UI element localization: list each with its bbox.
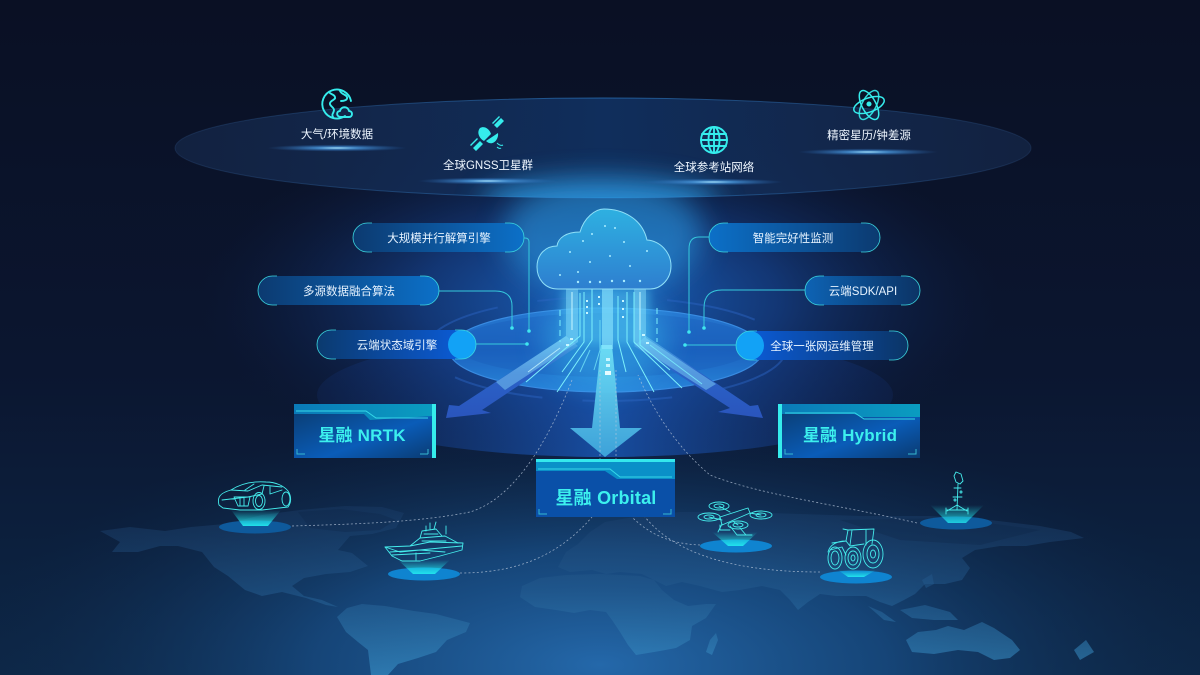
arrow: to Orbital (570, 345, 642, 457)
panel: Orbital: 星融 Orbital (555, 488, 657, 508)
cloud dots (559, 225, 648, 283)
panel: engine 3: 云端状态域引擎 (357, 338, 438, 352)
connector lines (439, 237, 805, 347)
North America (100, 506, 404, 607)
center disk (426, 295, 786, 401)
label: 精密星历/钟差源 (827, 128, 911, 142)
cloud (537, 209, 671, 289)
icon: atom (852, 88, 886, 122)
New Zealand (1074, 640, 1094, 660)
arrow: to Hybrid (634, 336, 763, 418)
panel: engine 3 (317, 330, 476, 359)
Europe and Asia (558, 512, 1084, 610)
icon: globe (701, 127, 727, 153)
terminal: tractor (820, 529, 892, 584)
map dark regions (298, 509, 1040, 545)
panel: engine 1: 大规模并行解算引擎 (387, 231, 491, 245)
terminal: car (218, 482, 291, 534)
label: 全球参考站网络 (674, 160, 755, 174)
panel: service 2: 云端SDK/API (829, 285, 897, 298)
top data source ellipse (174, 88, 1032, 198)
label: 大气/环境数据 (301, 127, 374, 141)
source: GNSS satellites (418, 116, 558, 184)
panel: NRTK (294, 404, 436, 458)
Africa (520, 574, 716, 655)
label: 全球GNSS卫星群 (443, 158, 534, 172)
stream dots (566, 296, 649, 375)
large base ellipse (317, 333, 893, 457)
terminal: drone (698, 502, 772, 552)
icon: earth with cloud (322, 90, 352, 119)
panel: engine 2 (258, 276, 439, 305)
panel: engine 2: 多源数据融合算法 (303, 284, 395, 298)
panel: Hybrid (778, 404, 920, 458)
Southeast Asia islands (868, 574, 958, 622)
terminal: ship (385, 522, 463, 580)
panel: NRTK: 星融 NRTK (318, 426, 406, 445)
source: reference stations (643, 127, 783, 186)
source: ephemeris and clock (798, 88, 938, 156)
panel: service 3: 全球一张网运维管理 (770, 339, 874, 353)
panel: Hybrid: 星融 Hybrid (803, 426, 897, 445)
panel: engine 1 (353, 223, 524, 252)
panel: service 1 (709, 223, 880, 252)
source: atmosphere data (267, 90, 407, 152)
panel: Orbital (536, 459, 675, 517)
Australia (906, 622, 1020, 660)
glow behind the cloud (503, 175, 703, 295)
icon: satellite (470, 116, 504, 151)
South America (337, 604, 470, 675)
panel: service 1: 智能完好性监测 (753, 231, 833, 245)
data streams from the cloud (496, 289, 716, 392)
dotted links (292, 370, 917, 573)
world map (100, 506, 1094, 675)
terminal: base station (920, 472, 992, 530)
panel: service 2 (805, 276, 920, 305)
arrow: to NRTK (446, 336, 578, 418)
panel: service 3 (736, 331, 908, 360)
Madagascar (706, 633, 718, 655)
